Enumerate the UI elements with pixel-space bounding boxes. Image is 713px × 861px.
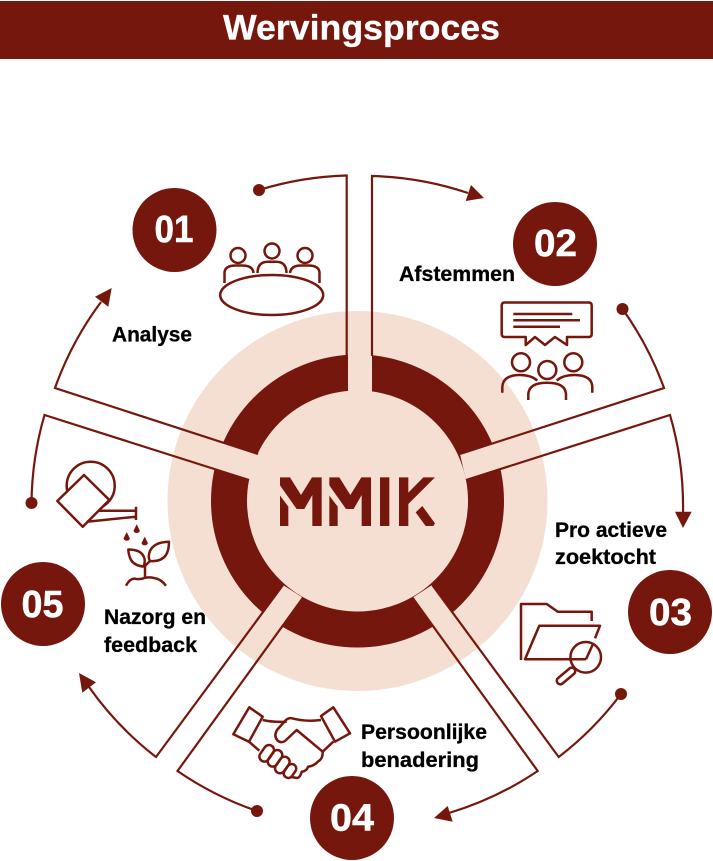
badge 04: 04 bbox=[330, 798, 374, 840]
label: Pro actieve zoektocht bbox=[555, 519, 667, 569]
label: Pro actieve zoektocht: zoektocht bbox=[555, 546, 656, 569]
icon: handshake bbox=[233, 707, 350, 780]
segment 01 outline and arrow bbox=[55, 176, 347, 454]
icon: watering can and plant bbox=[57, 462, 169, 586]
badge 01: 01 bbox=[154, 209, 194, 251]
badge 01 bbox=[132, 188, 216, 272]
segment 03 outline and arrow bbox=[432, 415, 692, 757]
central circle with ring bbox=[168, 311, 548, 691]
logo MMIK bbox=[280, 477, 435, 526]
label: Nazorg en feedback: Nazorg en bbox=[104, 606, 206, 629]
label: Pro actieve zoektocht: Pro actieve bbox=[555, 519, 667, 542]
label: Persoonlijke benadering: benadering bbox=[361, 749, 479, 772]
icon: folder with magnifier bbox=[521, 604, 601, 686]
icon: meeting table bbox=[220, 244, 323, 315]
badge 05: 05 bbox=[22, 584, 64, 626]
label: Afstemmen: Afstemmen bbox=[399, 263, 515, 286]
label: Analyse: Analyse bbox=[112, 324, 192, 346]
badge 04 bbox=[310, 776, 394, 860]
icon: speech bubble with team bbox=[502, 302, 592, 400]
label: Nazorg en feedback bbox=[104, 606, 206, 657]
label: Persoonlijke benadering: Persoonlijke bbox=[361, 721, 487, 744]
segment 04 outline and arrow bbox=[178, 598, 538, 822]
badge 05 bbox=[1, 562, 85, 646]
label: Persoonlijke benadering bbox=[361, 721, 487, 772]
title: Wervingsproces bbox=[223, 8, 500, 48]
badge 02 bbox=[513, 202, 597, 286]
header bar bbox=[0, 1, 713, 59]
badge 03 bbox=[628, 570, 712, 654]
segment 02 outline and arrow bbox=[372, 176, 664, 454]
label: Nazorg en feedback: feedback bbox=[104, 634, 197, 657]
badge 02: 02 bbox=[534, 223, 577, 265]
badge 03: 03 bbox=[649, 592, 692, 634]
segment 05 outline and arrow bbox=[26, 415, 283, 757]
